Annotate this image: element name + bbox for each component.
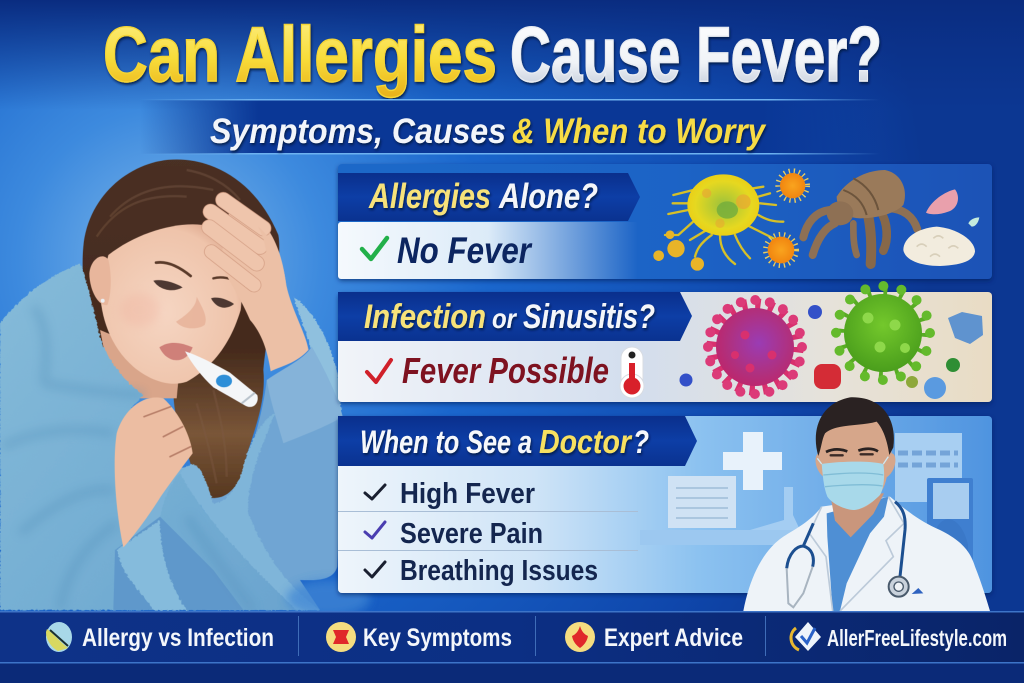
folder bbox=[927, 478, 973, 568]
icon: yellow pollen grain bbox=[665, 174, 783, 264]
thermometer bbox=[185, 351, 258, 407]
lips bbox=[159, 343, 193, 360]
eyes bbox=[831, 451, 873, 459]
mask bbox=[817, 457, 888, 510]
clipboard bbox=[668, 476, 736, 528]
ear bbox=[89, 256, 111, 305]
subtitle ribbon bbox=[140, 99, 880, 154]
footer item: website bbox=[791, 622, 1007, 651]
header: infection or sinusitis: Infection bbox=[364, 298, 486, 336]
list dividers bbox=[338, 511, 638, 551]
subtitle ribbon: & When to Worry bbox=[512, 112, 766, 151]
icon: orange pollen bottom bbox=[766, 235, 796, 265]
icon: coloured allergen particles bbox=[680, 305, 983, 399]
header: infection or sinusitis: Sinusitis? bbox=[523, 298, 655, 336]
fist bbox=[115, 397, 193, 547]
header: allergies alone: Allergies bbox=[368, 177, 491, 216]
header: when to see a doctor: Doctor bbox=[539, 423, 633, 460]
shirt bbox=[827, 497, 888, 611]
title: Can Allergies bbox=[103, 10, 497, 98]
list item: breathing issues: Breathing Issues bbox=[400, 555, 598, 587]
panel lower: no fever bbox=[338, 222, 638, 279]
sweater centre bbox=[113, 517, 243, 610]
coat bbox=[743, 497, 990, 611]
header: when to see a doctor: ? bbox=[633, 424, 649, 460]
footer dividers bbox=[298, 616, 766, 656]
header: allergies alone: Alone? bbox=[498, 177, 598, 216]
panel: allergies alone bbox=[338, 164, 992, 279]
footer item: expert advice: Expert Advice bbox=[604, 624, 743, 652]
blanket main bbox=[0, 263, 297, 610]
icon: green virus bbox=[836, 286, 930, 380]
header: infection or sinusitis: or bbox=[492, 303, 518, 334]
panel: infection or sinusitis bbox=[338, 286, 992, 402]
soft lower blue shape bbox=[287, 580, 370, 617]
sleeve cuff bbox=[267, 347, 343, 443]
footer item: key symptoms bbox=[326, 622, 512, 652]
blanket drape bbox=[180, 413, 320, 610]
eyes bbox=[153, 280, 183, 290]
pocket handkerchief bbox=[912, 588, 923, 594]
allergen illustrations bbox=[653, 170, 979, 271]
footer item: allergy vs infection: Allergy vs Infection bbox=[82, 624, 274, 652]
illustration: woman with fever wrapped in a blanket bbox=[0, 159, 370, 617]
clinic backdrop bbox=[668, 432, 973, 560]
title bbox=[103, 10, 882, 98]
neck bbox=[830, 493, 884, 537]
blanket under fist bbox=[113, 467, 220, 577]
header: when to see a doctor bbox=[338, 416, 697, 466]
nose bbox=[176, 297, 206, 328]
brows bbox=[826, 449, 878, 452]
subtitle ribbon: Symptoms, Causes bbox=[210, 112, 506, 151]
illustration: doctor with mask bbox=[743, 397, 990, 611]
desk bbox=[679, 530, 794, 545]
red check mark bbox=[367, 360, 391, 382]
hand on forehead bbox=[209, 200, 308, 371]
earring bbox=[101, 299, 105, 303]
icon: thermometer bbox=[620, 347, 644, 398]
list item: high fever: High Fever bbox=[400, 478, 535, 510]
flask bbox=[750, 487, 800, 530]
icon: pink allergen bbox=[926, 189, 958, 214]
neck bbox=[100, 330, 180, 398]
lapels bbox=[809, 497, 904, 611]
sweater lower bbox=[207, 347, 343, 610]
blanket behind shoulder bbox=[293, 297, 342, 417]
title: Cause Fever? bbox=[510, 10, 882, 98]
footer item: expert advice bbox=[565, 622, 743, 652]
footer item: allergy vs infection bbox=[46, 622, 274, 652]
icon: purple virus bbox=[708, 300, 802, 394]
stethoscope bbox=[787, 502, 909, 607]
panel: when to see a doctor bbox=[338, 416, 992, 593]
header: when to see a doctor: When to See a bbox=[360, 424, 532, 460]
head bbox=[816, 410, 895, 510]
wall chart bbox=[895, 433, 962, 502]
header: allergies alone bbox=[338, 173, 640, 221]
panel lower: no fever: No Fever bbox=[397, 230, 533, 271]
icon: mint speck bbox=[968, 217, 979, 227]
list item: severe pain: Severe Pain bbox=[400, 518, 543, 550]
footer bar bbox=[0, 611, 1024, 683]
cheek blush bbox=[120, 293, 160, 327]
icon: orange pollen top bbox=[778, 171, 807, 200]
blanket inner fold bbox=[117, 520, 187, 610]
hair bbox=[82, 159, 279, 502]
brows bbox=[156, 262, 191, 276]
icon: medical cross bbox=[723, 432, 782, 490]
icon: small yellow flowers bbox=[653, 230, 704, 271]
footer item: key symptoms: Key Symptoms bbox=[363, 624, 512, 652]
fever possible text: Fever Possible bbox=[402, 350, 609, 391]
hair bbox=[816, 397, 894, 456]
green check mark bbox=[362, 238, 387, 259]
header: infection or sinusitis bbox=[338, 292, 692, 341]
face bbox=[100, 224, 241, 384]
blanket shading bbox=[3, 307, 253, 610]
icon: white mold cluster bbox=[903, 227, 975, 266]
icon: dust mite bbox=[803, 170, 917, 264]
